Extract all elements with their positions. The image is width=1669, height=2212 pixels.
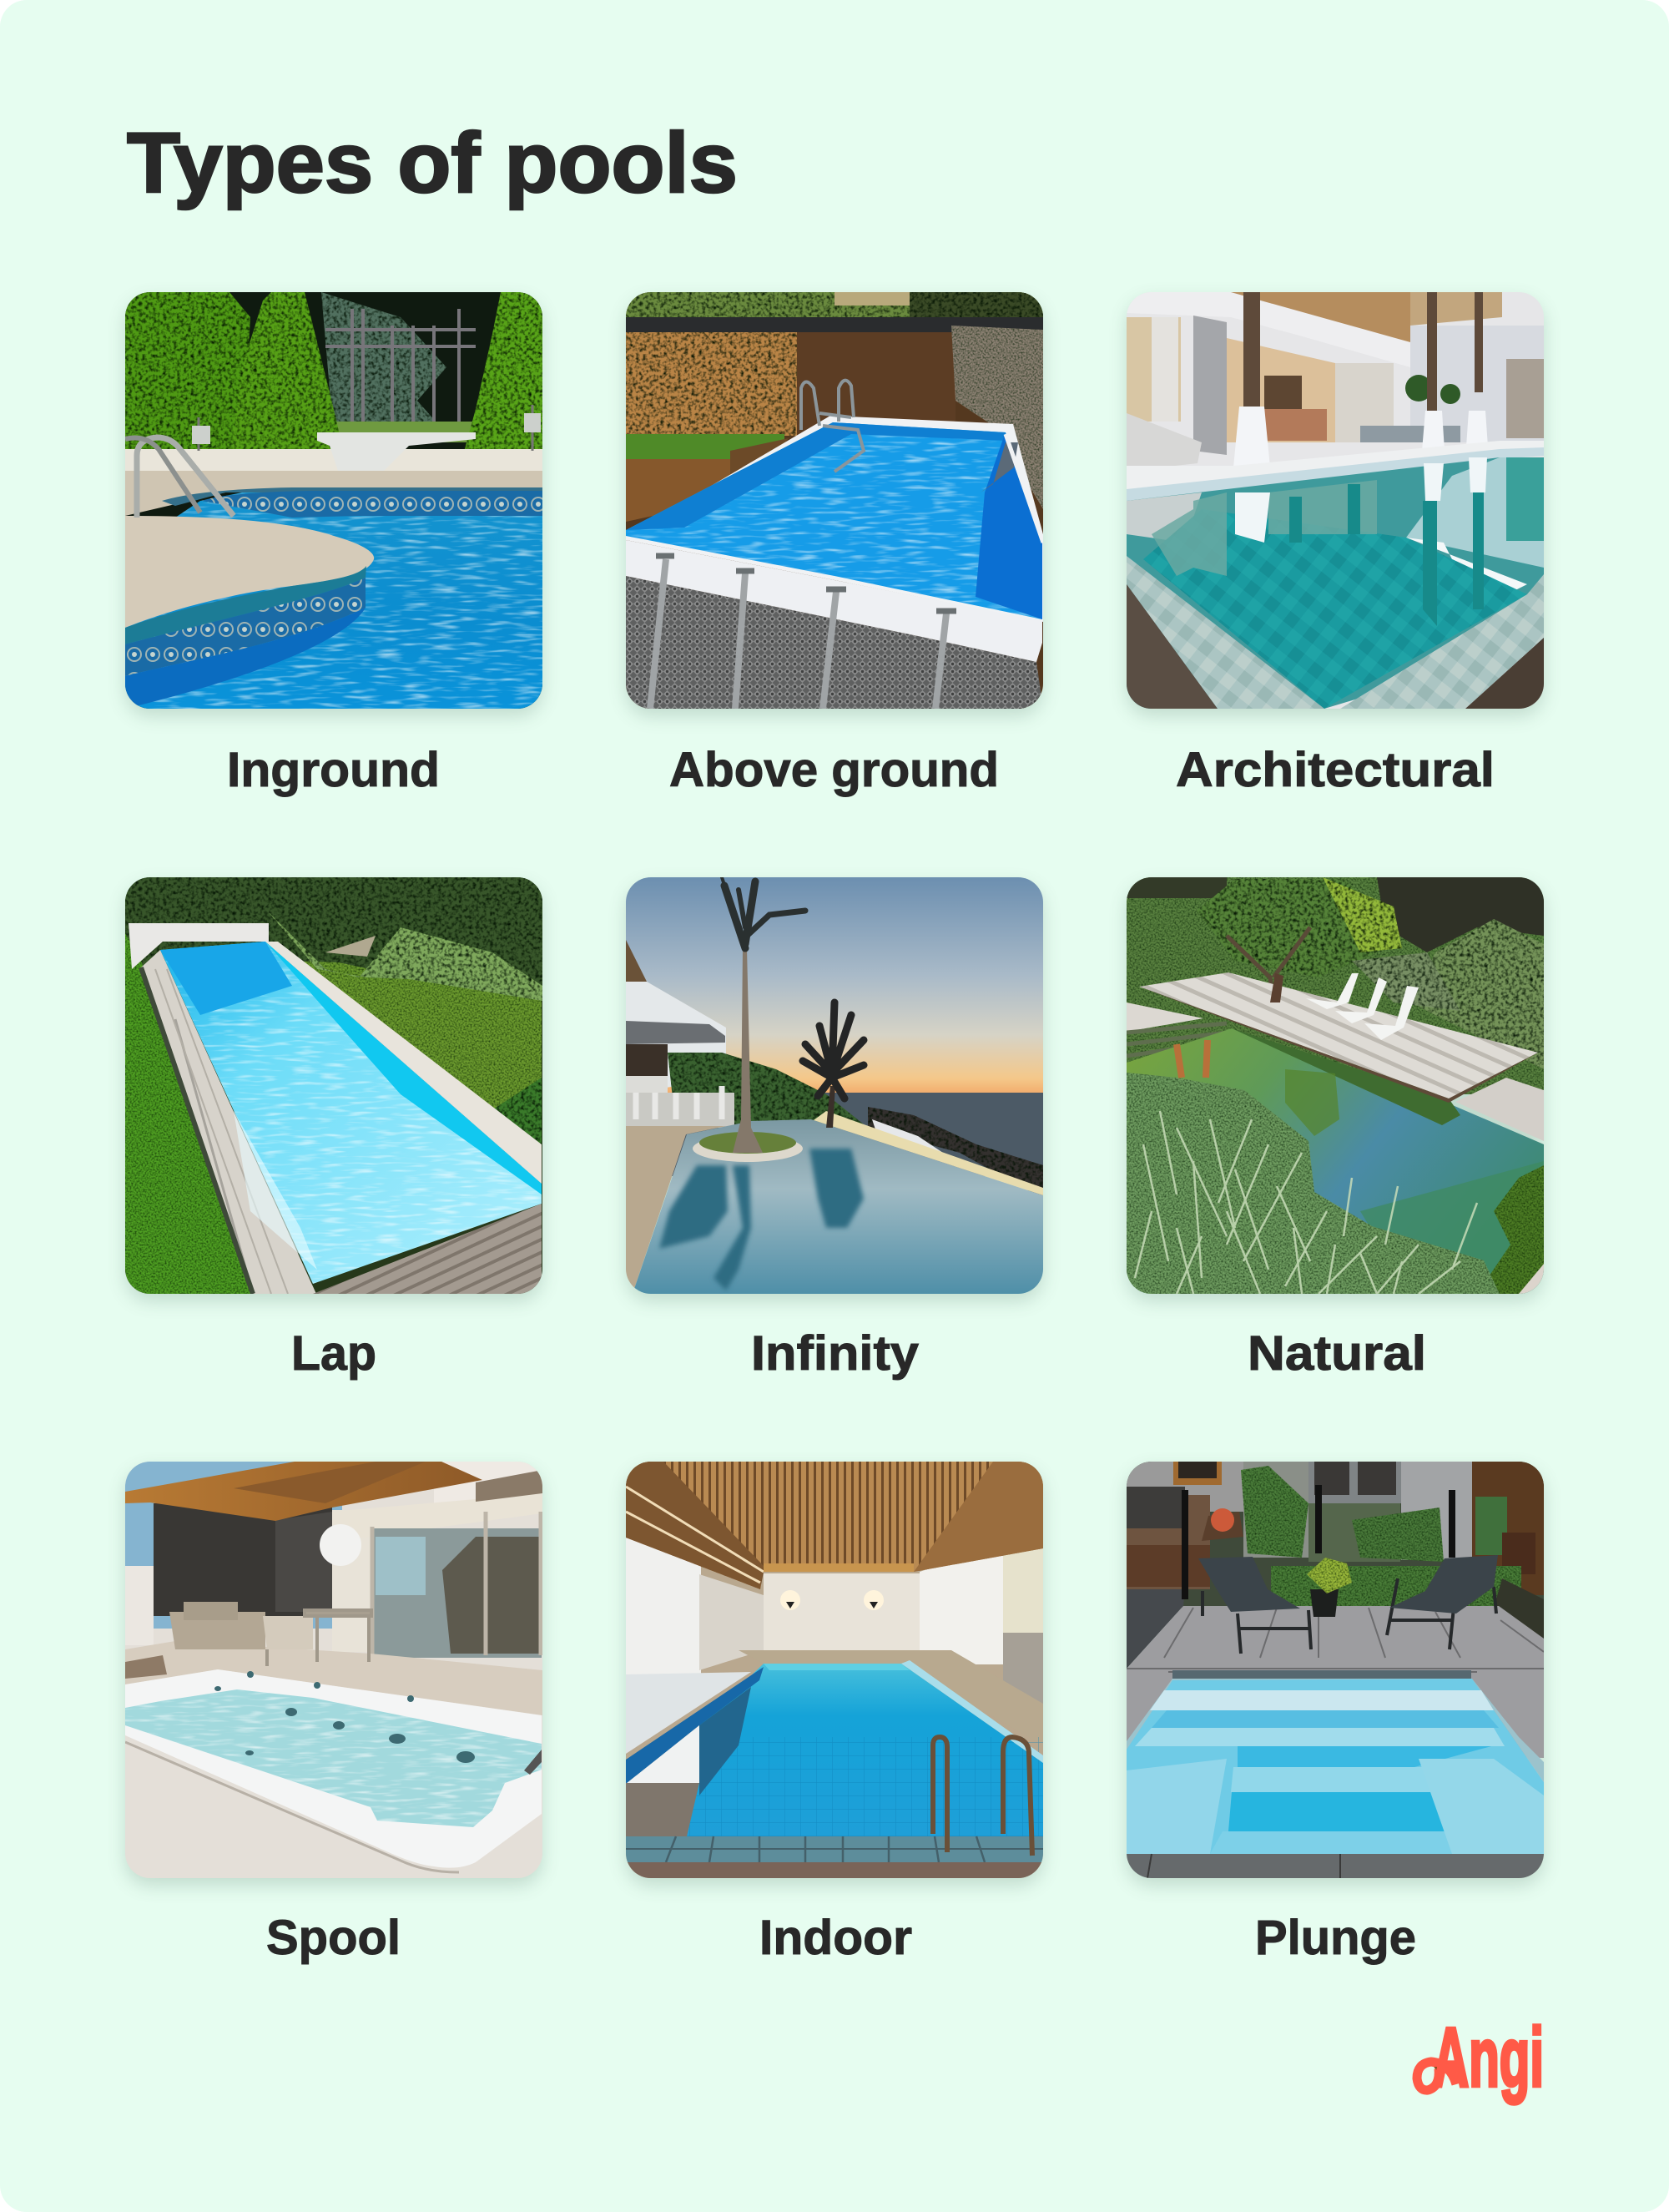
label: Natural: Natural (1248, 1326, 1426, 1381)
pool border (1127, 556, 1324, 709)
water (125, 1689, 542, 1827)
deck (1127, 441, 1544, 489)
terrace (626, 1126, 726, 1294)
card: Architectural (1127, 292, 1544, 797)
potted plant (1310, 1589, 1339, 1617)
poolside tiles (626, 1783, 699, 1836)
label: Above ground: Above ground (669, 743, 999, 797)
photo: lap pool (125, 877, 542, 1294)
lounge chairs (1306, 973, 1419, 1040)
pool water (1127, 457, 1544, 709)
spool shell (125, 1669, 542, 1868)
lawn right (267, 943, 542, 1109)
sliding doors (371, 1528, 542, 1658)
decking bottom (313, 1204, 542, 1294)
title: Types of pools (127, 115, 738, 210)
card: Indoor (626, 1462, 1043, 1965)
card: Infinity (626, 877, 1043, 1381)
deck (1127, 1002, 1203, 1032)
planter (693, 1135, 803, 1162)
photo: plunge pool (1127, 1462, 1544, 1878)
poolside floor (739, 1650, 1043, 1745)
hot tub (129, 923, 269, 969)
label: Lap: Lap (291, 1326, 376, 1381)
pool water (1172, 1670, 1471, 1679)
stone patio (1127, 1606, 1544, 1758)
patio furniture (169, 1612, 265, 1649)
patio floor (125, 1641, 542, 1715)
pool water (626, 416, 1043, 622)
pool water (633, 1119, 1043, 1294)
photo: indoor pool (626, 1462, 1043, 1878)
label: Spool: Spool (266, 1911, 401, 1965)
label: Infinity: Infinity (751, 1326, 919, 1381)
label: Indoor: Indoor (759, 1911, 912, 1965)
dark pavement (1127, 1589, 1185, 1669)
photo: inground pool (108, 292, 542, 709)
coast (868, 1107, 1043, 1199)
photo: spool (125, 1462, 542, 1878)
label: Inground: Inground (227, 743, 440, 797)
palm trees (733, 948, 763, 1153)
decking left (141, 950, 316, 1294)
photo: natural pool (1127, 877, 1544, 1294)
photo: architectural pool (1127, 292, 1544, 709)
pool water (1127, 1028, 1544, 1294)
card: Lap (125, 877, 542, 1381)
wooden ceiling (626, 1462, 1043, 1589)
card: Spool (125, 1462, 542, 1965)
card: Plunge (1127, 1462, 1544, 1965)
front deck (125, 516, 374, 628)
posts (1185, 1485, 1452, 1599)
reeds (1127, 1073, 1500, 1294)
photo: infinity pool (626, 877, 1043, 1294)
side wall mesh (626, 576, 1043, 709)
wooden roof (125, 1462, 482, 1521)
ladder rails (933, 1737, 1032, 1856)
logo: Angi (1417, 2011, 1544, 2104)
card: Above ground (626, 292, 1043, 797)
pool water (160, 942, 542, 1284)
pool water (125, 489, 542, 709)
label: Architectural: Architectural (1176, 743, 1495, 797)
label: Plunge: Plunge (1255, 1911, 1416, 1965)
pool water (687, 1664, 1043, 1836)
card: Natural (1127, 877, 1544, 1381)
photo: above ground pool (626, 292, 1043, 709)
logo: Angi: Angi (1433, 2011, 1544, 2104)
lounge chairs (1198, 1557, 1300, 1612)
card: Inground (108, 292, 542, 797)
front coping (1127, 1854, 1544, 1878)
